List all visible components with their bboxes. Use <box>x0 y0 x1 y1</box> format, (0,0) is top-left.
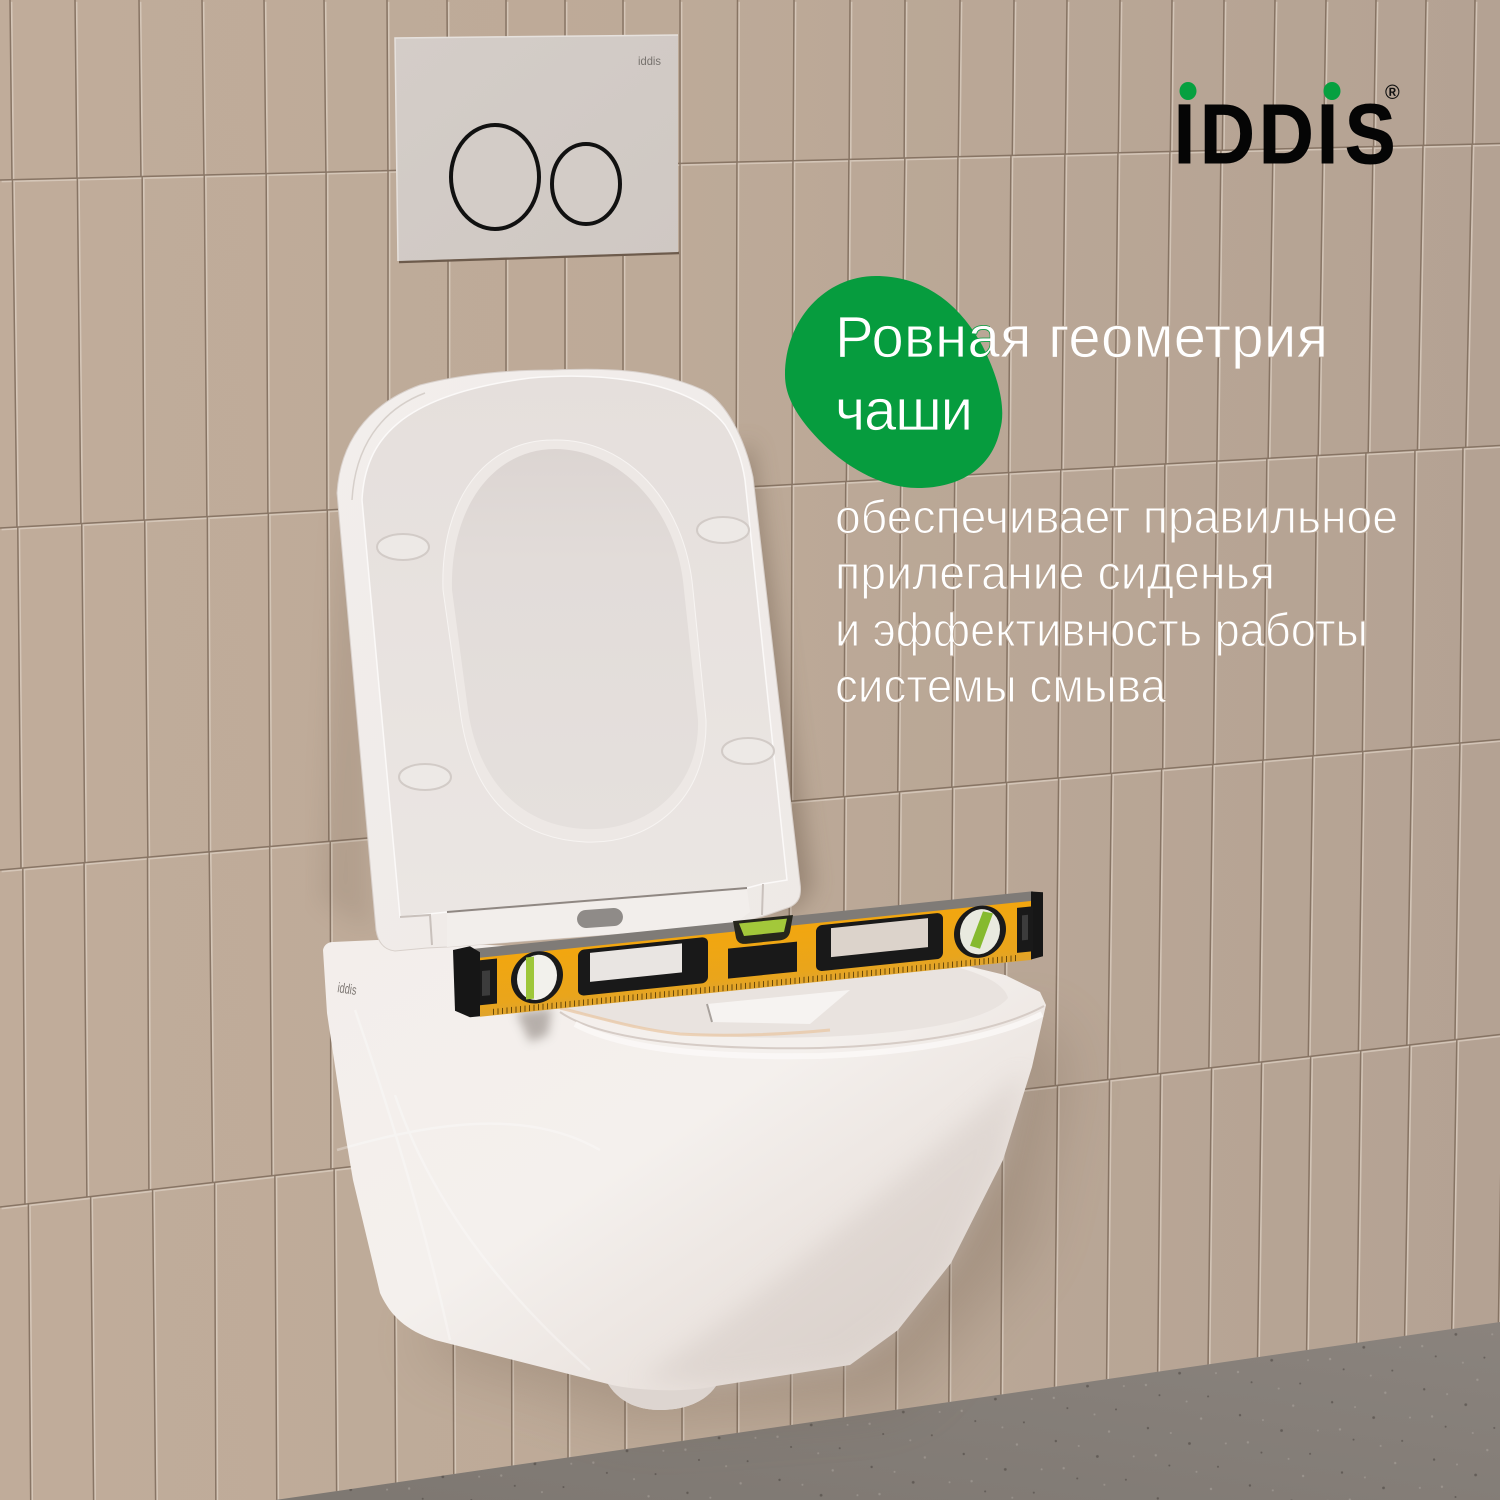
registered mark: ® <box>1385 82 1400 104</box>
bumpers <box>377 517 774 790</box>
lid outer rim line <box>352 393 425 500</box>
bowl logo: iddis <box>337 979 358 998</box>
body text: системы смыва <box>835 659 1167 712</box>
level top surface <box>467 891 1033 960</box>
logo wordmark: IDDIS <box>1174 87 1395 181</box>
spout <box>608 1384 716 1410</box>
ruler ticks <box>493 958 1018 1012</box>
level shadow on bowl <box>516 1008 552 1042</box>
bowl interior step <box>707 990 850 1024</box>
spirit level <box>453 887 1043 1020</box>
center vial <box>733 915 793 945</box>
body text: обеспечивает правильное <box>835 490 1398 543</box>
toilet bowl <box>323 935 1046 1410</box>
hinge button <box>576 907 624 929</box>
lid inner recess <box>362 376 787 917</box>
floor <box>0 1322 1500 1500</box>
left grip <box>578 937 708 996</box>
wall shadows around toilet <box>320 440 1070 1420</box>
panel logo: iddis <box>638 54 661 68</box>
right vial <box>954 903 1006 960</box>
body text: прилегание сиденья <box>835 546 1275 599</box>
left end cap <box>453 945 480 1019</box>
right end cap <box>1031 890 1043 959</box>
heading: чаши <box>835 378 973 443</box>
level body <box>480 901 1032 1017</box>
black label <box>728 942 797 979</box>
left bracket <box>480 958 497 1005</box>
right grip <box>816 913 943 972</box>
bowl facets <box>337 1010 600 1370</box>
rim highlight <box>560 1006 1044 1048</box>
lid outer <box>337 369 801 951</box>
seat ring <box>443 440 706 842</box>
bowl front lower shading <box>640 1070 1025 1386</box>
toilet seat lid <box>337 369 801 951</box>
right bracket <box>1017 906 1033 953</box>
logo dots <box>1180 82 1340 100</box>
heading: Ровная геометрия <box>835 305 1328 370</box>
bowl interior <box>563 955 1008 1038</box>
flush panel <box>395 35 679 262</box>
heading <box>835 305 1328 443</box>
level reflection in bowl <box>560 1008 830 1035</box>
left vial <box>511 949 563 1006</box>
hinge strip <box>447 889 750 947</box>
green blob <box>785 276 1002 488</box>
bowl body <box>323 935 1046 1410</box>
flush button small <box>552 144 620 224</box>
body text <box>835 490 1398 712</box>
hinge legs <box>400 884 763 945</box>
logo <box>1174 82 1400 181</box>
seat opening <box>452 449 698 829</box>
flush button large <box>451 125 539 229</box>
body text: и эффективность работы <box>835 603 1368 656</box>
